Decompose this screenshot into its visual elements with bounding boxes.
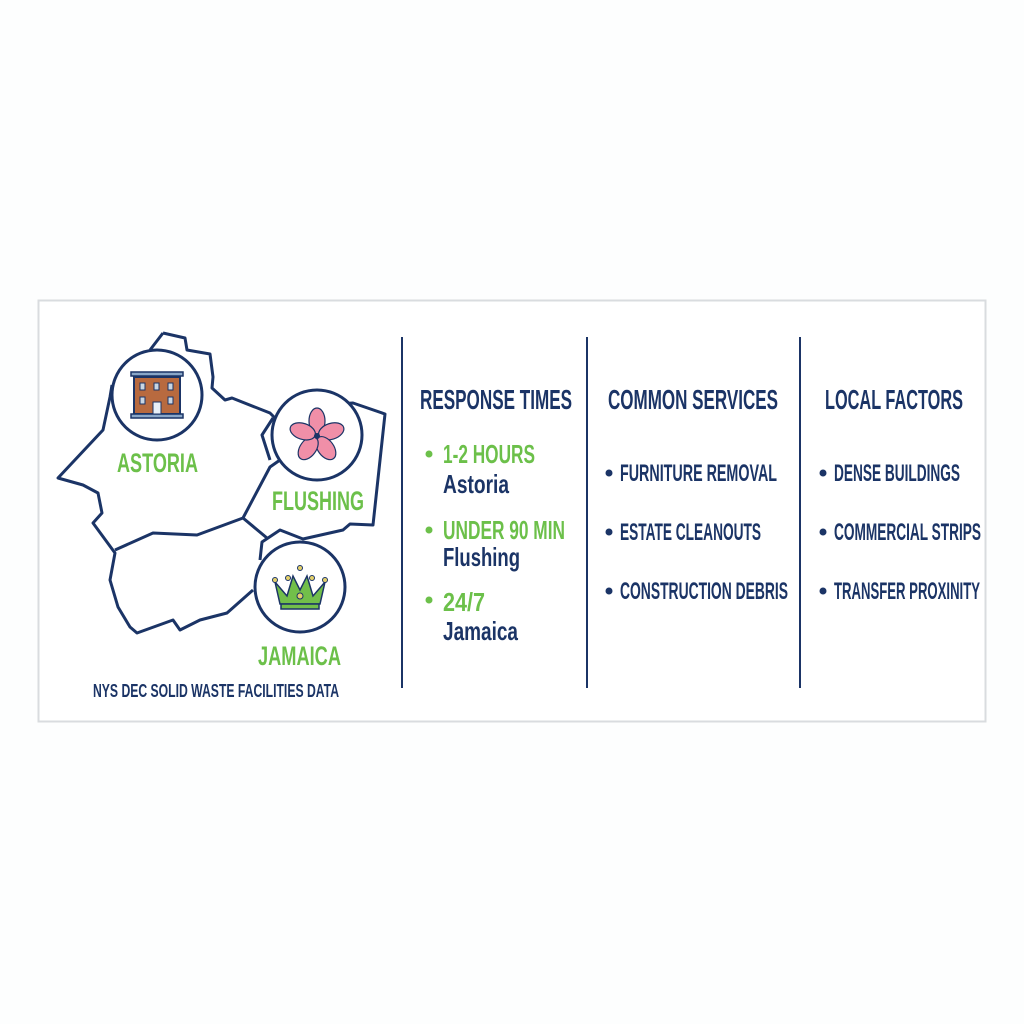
- column: response times: 24/7: [443, 587, 485, 617]
- label: jamaica: JAMAICA: [258, 641, 341, 671]
- icon: flushing blossom: [272, 390, 362, 480]
- dividers: [402, 337, 800, 688]
- column: common services: FURNITURE REMOVAL: [620, 460, 777, 487]
- icon: jamaica crown: [255, 542, 345, 632]
- panel: main frame: [38, 300, 986, 722]
- column: response times: RESPONSE TIMES: [420, 384, 572, 415]
- column: response times: Jamaica: [443, 616, 518, 646]
- column: common services: ESTATE CLEANOUTS: [620, 519, 761, 546]
- label: astoria: ASTORIA: [117, 448, 198, 478]
- column: response times: UNDER 90 MIN: [443, 515, 565, 545]
- column: response times: Astoria: [443, 469, 509, 499]
- source note: NYS DEC SOLID WASTE FACILITIES DATA: [93, 681, 339, 701]
- column: local factors: [820, 384, 981, 605]
- column: response times: [420, 384, 572, 646]
- column: common services: COMMON SERVICES: [608, 384, 778, 415]
- column: common services: [606, 384, 788, 605]
- column: response times: 1-2 HOURS: [443, 439, 535, 469]
- label: flushing: FLUSHING: [272, 486, 364, 516]
- map: queens outline: [58, 333, 385, 633]
- column: response times: Flushing: [443, 542, 520, 572]
- icon: astoria building: [112, 350, 202, 440]
- column: common services: CONSTRUCTION DEBRIS: [620, 578, 788, 605]
